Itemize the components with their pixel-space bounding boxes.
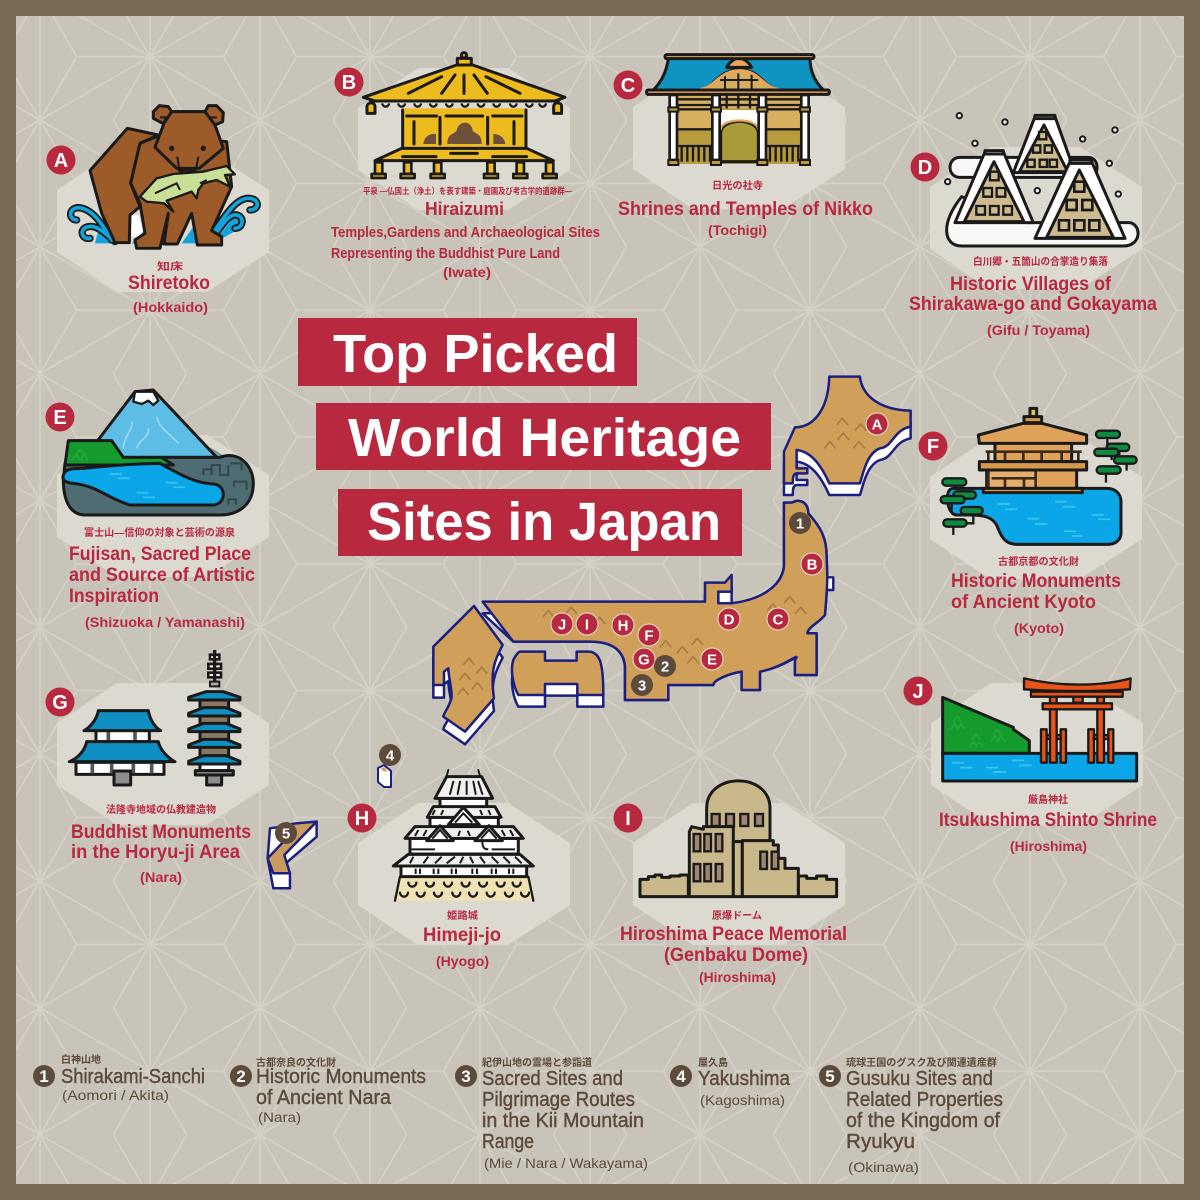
site label D: (Gifu / Toyama) — [987, 322, 1090, 338]
site label B — [331, 186, 600, 280]
title: Top Picked — [333, 324, 618, 384]
map marker E: E — [707, 652, 717, 668]
site label H: Himeji-jo — [423, 925, 501, 946]
footer list 2: Ancient Nara: of Ancient Nara — [256, 1087, 392, 1109]
badge F: F — [927, 436, 939, 458]
badge B: B — [342, 72, 356, 94]
map: Honshu — [483, 501, 833, 700]
site label A: Shiretoko — [128, 273, 210, 294]
site label H: (Hyogo) — [436, 953, 489, 969]
badge J — [904, 676, 932, 706]
site label G — [71, 803, 251, 885]
site label C: Shrines and Temples of Nikko — [618, 199, 873, 220]
map: mountain marks — [457, 418, 866, 695]
badge C — [614, 70, 642, 100]
icon: golden hall — [363, 53, 565, 178]
footer list 5: Ryukyu: 5 — [825, 1067, 835, 1086]
footer list 3: Kii Mountain Range: in the Kii Mountain — [482, 1110, 644, 1132]
badge H — [348, 804, 376, 832]
footer list 5: Ryukyu — [819, 1056, 1003, 1175]
badge F — [918, 432, 948, 460]
site label D: Shirakawa-go and Gokayama — [909, 294, 1157, 315]
panel B: Hiraizumi — [331, 53, 600, 280]
site label B: 平泉 ―仏国土（浄土）を表す建築・庭園及び考古学的遺跡群― — [363, 186, 572, 196]
badge B — [334, 68, 364, 96]
panel G: Horyu-ji — [46, 650, 269, 885]
site label E: and Source of Artistic — [69, 565, 255, 586]
footer list 5: Ryukyu: of the Kingdom of — [846, 1110, 1000, 1132]
title: Sites in Japan — [367, 492, 721, 552]
site label G: in the Horyu-ji Area — [71, 842, 240, 863]
map: Yakushima island — [378, 744, 401, 787]
icon: Genbaku Dome — [640, 781, 837, 897]
site label E: Inspiration — [69, 586, 159, 607]
icon: Himeji castle — [393, 770, 533, 901]
title: World Heritage — [348, 408, 741, 468]
site label G: 法隆寺地域の仏教建造物 — [106, 803, 216, 816]
footer list 3: Kii Mountain Range: Sacred Sites and — [482, 1068, 623, 1090]
panel C: Nikko — [614, 55, 873, 238]
icon: Kinkaku-ji and pond — [941, 408, 1137, 544]
footer list 3: Kii Mountain Range: 紀伊山地の霊場と参詣道 — [482, 1056, 592, 1069]
site label B: Hiraizumi — [425, 199, 504, 219]
map marker B — [801, 553, 823, 575]
site label F: Historic Monuments — [951, 571, 1121, 592]
footer list 3: Kii Mountain Range — [455, 1056, 648, 1171]
footer list 4: Yakushima: 屋久島 — [698, 1056, 728, 1069]
icon: Nikko gate — [647, 55, 829, 165]
footer list 3: Kii Mountain Range: (Mie / Nara / Wakayama) — [484, 1155, 648, 1171]
footer list 4: Yakushima — [670, 1056, 791, 1108]
site label D: 白川郷・五箇山の合掌造り集落 — [973, 255, 1108, 268]
footer list 1: Shirakami-Sanchi — [33, 1053, 205, 1103]
panel A: Shiretoko — [46, 106, 269, 315]
icon: bear with salmon — [71, 106, 257, 248]
map: Okinawa island — [268, 822, 317, 888]
map: Kyushu — [433, 606, 503, 744]
badge J: J — [912, 681, 924, 703]
site label D: Historic Villages of — [950, 274, 1112, 295]
site label I — [620, 909, 847, 985]
map marker F — [638, 624, 660, 646]
site label I: (Genbaku Dome) — [664, 945, 808, 966]
icon: Mount Fuji and lake — [63, 390, 253, 515]
map of Japan — [268, 377, 911, 888]
map marker A — [866, 413, 888, 435]
panel D: Shirakawa-go — [909, 113, 1157, 338]
badge A — [46, 146, 76, 174]
footer list 5: Ryukyu: Gusuku Sites and — [846, 1068, 993, 1090]
site label F: of Ancient Kyoto — [951, 592, 1096, 613]
footer list 1: Shirakami-Sanchi: (Aomori / Akita) — [62, 1087, 169, 1103]
site label C — [618, 179, 873, 238]
site label E: 富士山―信仰の対象と芸術の源泉 — [84, 526, 235, 539]
footer list 2: Ancient Nara — [230, 1056, 426, 1125]
panel F: Kyoto — [918, 408, 1142, 636]
site label A: (Hokkaido) — [133, 299, 208, 315]
map marker G: G — [638, 652, 650, 668]
site label J: 厳島神社 — [1028, 793, 1068, 806]
site label I: 原爆ドーム — [712, 909, 762, 922]
badge E — [46, 402, 74, 432]
footer list 1: Shirakami-Sanchi: Shirakami-Sanchi — [61, 1066, 205, 1088]
map marker E — [701, 648, 723, 670]
footer list 2: Ancient Nara: Historic Monuments — [256, 1066, 426, 1088]
panel J: Itsukushima — [904, 676, 1157, 854]
site label D — [909, 255, 1157, 338]
footer list 3: Kii Mountain Range: Range — [482, 1131, 534, 1153]
site label F: (Kyoto) — [1014, 620, 1064, 636]
footer list 1: Shirakami-Sanchi: 白神山地 — [61, 1053, 101, 1066]
site label C: (Tochigi) — [708, 222, 767, 238]
map marker J — [551, 613, 573, 635]
icon: Itsukushima torii — [943, 678, 1137, 781]
site label E — [69, 526, 255, 630]
panel H: Himeji-jo — [348, 770, 570, 969]
map marker 1 — [789, 512, 811, 534]
map marker H: H — [618, 618, 628, 634]
map marker 1: 1 — [796, 516, 804, 532]
map marker F: F — [644, 628, 654, 644]
badge E: E — [53, 407, 67, 429]
icon: gassho houses in snow — [945, 113, 1138, 246]
site label A: 知床 — [157, 260, 183, 273]
map: Okinawa island: 5 — [282, 826, 290, 842]
footer list 5: Ryukyu: Ryukyu — [846, 1131, 915, 1153]
badge D: D — [918, 157, 932, 179]
map marker 2 — [654, 655, 676, 677]
site label B: Representing the Buddhist Pure Land — [331, 246, 560, 262]
footer list 3: Kii Mountain Range: 3 — [461, 1067, 471, 1086]
site label H: 姫路城 — [447, 909, 478, 922]
map: Yakushima island: 4 — [386, 748, 395, 764]
site label G: (Nara) — [140, 869, 182, 885]
badge D — [910, 152, 940, 182]
map marker D: D — [724, 612, 735, 628]
panel I: Genbaku Dome — [614, 781, 847, 985]
map marker 3 — [631, 674, 653, 696]
map marker H — [612, 614, 634, 636]
map marker I — [576, 613, 598, 635]
badge G: G — [52, 692, 68, 714]
footer list 4: Yakushima: Yakushima — [698, 1068, 791, 1090]
map marker G — [633, 648, 655, 670]
badge G — [46, 688, 74, 716]
badge I — [614, 804, 642, 832]
badge I: I — [625, 808, 631, 830]
site label C: 日光の社寺 — [712, 179, 763, 192]
footer list 4: Yakushima: 4 — [676, 1067, 686, 1086]
map marker A: A — [872, 416, 883, 434]
site label E: (Shizuoka / Yamanashi) — [85, 614, 245, 630]
site label B: (Iwate) — [443, 264, 491, 280]
map marker C — [767, 608, 789, 630]
site label J: (Hiroshima) — [1010, 838, 1087, 854]
site label I: (Hiroshima) — [699, 969, 776, 985]
badge H: H — [355, 808, 369, 830]
badge A: A — [54, 150, 68, 172]
footer list 5: Ryukyu: 琉球王国のグスク及び関連遺産群 — [846, 1056, 997, 1069]
map: Hokkaido — [784, 377, 911, 495]
map marker B: B — [807, 556, 818, 574]
footer list 4: Yakushima: (Kagoshima) — [700, 1092, 785, 1108]
site label I: Hiroshima Peace Memorial — [620, 924, 847, 945]
site label H — [423, 909, 501, 969]
footer list 3: Kii Mountain Range: Pilgrimage Routes — [482, 1089, 635, 1111]
site label F — [951, 555, 1121, 636]
site label G: Buddhist Monuments — [71, 822, 251, 843]
badge C: C — [621, 75, 635, 97]
site label J — [939, 793, 1157, 854]
map marker I: I — [585, 616, 589, 634]
site label J: Itsukushima Shinto Shrine — [939, 810, 1157, 831]
map marker 2: 2 — [661, 658, 669, 676]
footer list 2: Ancient Nara: 2 — [236, 1067, 246, 1086]
title — [298, 318, 771, 556]
footer list 2: Ancient Nara: 古都奈良の文化財 — [256, 1056, 336, 1069]
site label B: Temples,Gardens and Archaeological Sites — [331, 225, 600, 241]
map marker J: J — [558, 616, 566, 634]
footer list 2: Ancient Nara: (Nara) — [258, 1109, 301, 1125]
map: Shikoku — [512, 652, 603, 707]
footer list 5: Ryukyu: (Okinawa) — [848, 1159, 919, 1175]
footer list 1: Shirakami-Sanchi: 1 — [39, 1067, 49, 1086]
site label A — [128, 260, 210, 315]
site label E: Fujisan, Sacred Place — [69, 544, 251, 565]
panel E: Fujisan — [46, 390, 269, 630]
map marker D — [718, 608, 740, 630]
footer list 5: Ryukyu: Related Properties — [846, 1089, 1003, 1111]
site label F: 古都京都の文化財 — [998, 555, 1079, 568]
map marker 3: 3 — [638, 678, 646, 694]
icon: Horyu-ji hall and pagoda — [69, 650, 240, 785]
map marker C: C — [773, 612, 784, 628]
